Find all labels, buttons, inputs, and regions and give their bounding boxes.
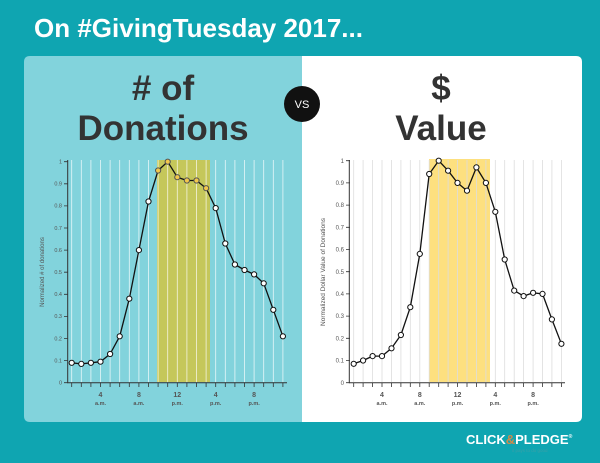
heading: $ Value: Value: [395, 109, 487, 148]
chart: donations: 0: [59, 380, 62, 386]
chart: value: 0: [341, 381, 345, 387]
chart: value: Normalized Dollar Value of Donations: [320, 217, 327, 326]
heading: # of Donations: Donations: [77, 109, 249, 148]
title: On #GivingTuesday 2017...: [34, 13, 363, 43]
chart: donations: 0.7: [54, 226, 62, 232]
chart: value: p.m.: [527, 401, 539, 407]
logo: Click & Pledge: ®: [569, 433, 573, 440]
panel: number of donations: [24, 56, 302, 422]
heading: # of Donations: [77, 69, 249, 148]
logo: Click & Pledge: it pays to do good: [512, 448, 548, 453]
chart: donations: 0.3: [54, 314, 62, 320]
chart: donations: 0.5: [54, 270, 62, 276]
chart: donations: 12: [173, 392, 181, 399]
chart: donations: 0.6: [54, 248, 62, 254]
chart: donations: 8: [252, 392, 256, 399]
chart: donations: 4: [214, 392, 218, 399]
chart: donations: 0.1: [54, 358, 62, 364]
chart: value: 0.4: [336, 292, 345, 298]
chart: donations: p.m.: [248, 401, 260, 407]
chart: value: 0.3: [336, 314, 345, 320]
chart: value: 12: [454, 392, 461, 399]
chart: value: 4: [493, 392, 497, 399]
chart: donations: 4: [99, 392, 103, 399]
logo: Click & Pledge: [466, 432, 573, 453]
chart: value: p.m.: [452, 401, 464, 407]
chart: value: 0.9: [336, 181, 345, 187]
heading: $ Value: [395, 69, 487, 148]
chart: value: 0.6: [336, 248, 345, 254]
chart: donations: p.m.: [172, 401, 183, 407]
chart: donations: 8: [137, 392, 141, 399]
logo: Click & Pledge: CLICK&PLEDGE: [466, 432, 569, 447]
chart: value: a.m.: [376, 401, 388, 407]
chart: value: 0.1: [336, 359, 345, 365]
vs badge: [284, 86, 320, 122]
chart: value: 0.5: [336, 270, 345, 276]
chart: value: [320, 158, 565, 407]
chart: donations: 0.4: [54, 292, 62, 298]
chart: value: 0.7: [336, 225, 345, 231]
chart: donations: 0.8: [54, 204, 62, 210]
chart: value: 0.2: [336, 336, 345, 342]
heading: $ Value: $: [431, 69, 451, 108]
chart: donations: [40, 159, 287, 407]
chart: donations: 0.9: [54, 182, 62, 188]
chart: value: 1: [341, 159, 345, 165]
chart: donations: p.m.: [210, 401, 222, 407]
chart: donations: 0.2: [54, 336, 62, 342]
chart: donations: a.m.: [95, 401, 106, 407]
panel: dollar value: [302, 56, 582, 422]
chart: donations: a.m.: [133, 401, 145, 407]
chart: donations: Normalized # of donations: [40, 237, 46, 307]
vs badge: VS: [295, 99, 309, 111]
chart: value: 0.8: [336, 203, 345, 209]
chart: value: 4: [380, 392, 384, 399]
chart: value: p.m.: [490, 401, 501, 407]
chart: value: a.m.: [414, 401, 426, 407]
heading: # of Donations: # of: [132, 69, 194, 108]
chart: donations: 1: [59, 160, 62, 166]
chart: value: 8: [418, 392, 422, 399]
chart: value: 8: [531, 392, 535, 399]
